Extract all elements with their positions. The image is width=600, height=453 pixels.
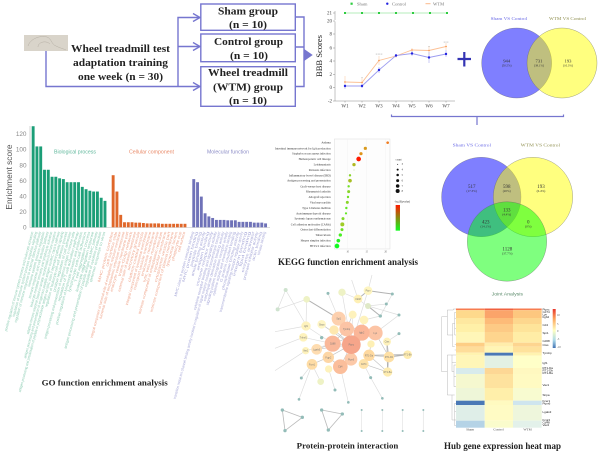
rotated term labels: molecular function: amide binding activity	[191, 231, 206, 277]
box: WTM group: (WTM) group	[213, 82, 283, 94]
box: WTM group: Wheel treadmill	[208, 68, 288, 79]
pathway labels: Allograft rejection	[309, 195, 331, 199]
rotated term labels: molecular function: protease inhibitor activity	[242, 231, 259, 281]
axis tick labels: 21	[327, 12, 332, 17]
node labels: Ptpn	[366, 290, 371, 293]
node labels: RT1-Bb	[404, 355, 412, 357]
heat map cells	[456, 308, 542, 428]
text: adaptation training: Wheel treadmill test	[71, 44, 171, 55]
gene labels: Fcgr2	[542, 418, 550, 422]
significance marks: ***	[443, 40, 449, 44]
venn counts: 0	[527, 220, 530, 226]
venn counts: 193	[537, 185, 545, 190]
rotated term labels: molecular function: immune receptor activity	[196, 231, 214, 286]
text: adaptation training: adaptation training	[73, 58, 168, 69]
node labels	[300, 290, 412, 374]
pathway labels: Leishmaniasis	[314, 163, 331, 167]
venn counts: 1128	[502, 248, 513, 252]
rotated term labels: molecular function: kinase binding	[257, 231, 267, 255]
venn counts: 598	[503, 185, 511, 190]
colour legend: -log10(pvalue)	[394, 201, 410, 204]
connector lines and arrows	[46, 14, 312, 90]
rotated term labels: molecular function: transition metal ion channel binding activity involved in regulation of signal receptor mediated transmembrane transport	[173, 231, 221, 399]
axis tick labels: W1	[341, 104, 349, 110]
rotated term labels: molecular function: MHC protein binding	[181, 231, 199, 282]
rotated term labels: cellular component: cell surface side	[105, 231, 118, 267]
chart legend	[350, 1, 444, 6]
venn counts	[467, 185, 545, 256]
rotated term labels: cellular component: integral component of lysosomal membrane	[125, 231, 148, 306]
colour scale	[553, 309, 561, 349]
rotated term labels: molecular function: antigen binding	[196, 231, 210, 271]
venn labels: Sham VS Control	[491, 16, 528, 21]
rotated term labels: cellular component: external side of plasma membrane	[117, 231, 137, 292]
node labels: Sirpa	[319, 323, 325, 326]
axis tick labels: 6	[330, 47, 332, 52]
network edges	[275, 275, 423, 431]
bars: cellular component	[112, 175, 186, 227]
rotated term labels: cellular component: vacuolar membrane	[153, 231, 167, 273]
panel: GO enrichment bar chart	[4, 126, 270, 399]
venn circles	[442, 157, 573, 281]
pathway labels: Autoimmune thyroid disease	[296, 211, 331, 215]
colour scale: -10	[557, 346, 561, 349]
significance marks: *	[361, 76, 363, 80]
axis tick labels: W7	[442, 104, 450, 110]
venn counts: 133	[503, 208, 511, 214]
pathway labels: Pertussis infection	[309, 168, 331, 172]
pathway labels: Staphylococcus aureus infection	[292, 152, 331, 156]
heat map title: Joint Analysis	[492, 292, 524, 297]
y axis: 60	[19, 178, 27, 185]
venn labels	[491, 16, 587, 21]
gene labels	[542, 308, 553, 427]
box: control group	[201, 34, 295, 62]
axis tick labels: W5	[408, 104, 416, 110]
category labels	[54, 149, 249, 155]
pathway labels: Antigen processing and presentation	[287, 179, 331, 183]
rotated term labels: molecular function: MHC class II protein complex binding	[174, 231, 195, 297]
gene labels: Cd68	[542, 339, 550, 343]
y axis: 80	[19, 162, 27, 169]
venn counts: (4.4%)	[502, 212, 511, 216]
node labels: Cd68	[330, 344, 336, 346]
heading: heat map: Hub gene expression heat map	[444, 441, 561, 451]
rotated term labels: cellular component: intrinsic component of endoplasmic reticulum	[138, 231, 164, 314]
box: WTM group	[201, 67, 295, 107]
y axis: Enrichment score	[4, 144, 14, 210]
y axis: 20	[19, 209, 27, 216]
y axis title: BBB Scores	[315, 35, 324, 77]
column labels: Sham	[466, 428, 474, 432]
pathway labels: Tuberculosis	[315, 233, 331, 237]
size legend: 4	[402, 168, 404, 171]
gene labels: Ptpn6	[542, 402, 551, 406]
node labels: Cd4	[338, 367, 343, 369]
gene labels: Vav2	[542, 423, 549, 427]
rotated term labels: cellular component: lytic vacuole membrane	[142, 231, 160, 282]
rotated term labels: molecular function: cytokine activity and chemokine binding	[212, 231, 233, 296]
axis tick labels: W4	[392, 104, 400, 110]
rotated term labels: cellular component: intrinsic component of plasma membrane	[150, 231, 175, 312]
rotated term labels: cellular component: clathrin-coated vesicle	[127, 231, 145, 282]
column labels	[466, 428, 532, 432]
three-set Venn diagram	[442, 142, 573, 281]
venn counts: (20%)	[503, 189, 511, 193]
venn counts: 944	[503, 58, 511, 64]
node labels: Ptpn6	[348, 358, 355, 361]
rotated term labels: molecular function: transmembrane signaling receptor regulator activity	[219, 231, 244, 312]
heading: KEGG analysis: KEGG function enrichment analysis	[278, 258, 418, 268]
gene labels: Vav1	[542, 383, 549, 387]
rotated term labels: biological process: regulation of immune response to external stimulus pathway	[14, 231, 42, 323]
size legend: 3	[402, 163, 404, 166]
rotated term labels: molecular function: peptide binding	[189, 231, 203, 267]
gene labels: Tyrobp	[542, 351, 552, 355]
gene labels: Spi1	[542, 331, 549, 335]
venn labels	[453, 142, 561, 148]
gene labels: Itgb2	[542, 315, 550, 319]
pathway labels	[275, 141, 331, 248]
rotated term labels: cellular component: endosome membrane	[140, 231, 156, 277]
venn counts: (39.1%)	[534, 64, 544, 68]
panel: protein-protein interaction network	[275, 275, 424, 432]
rotated term labels: biological process: T cell aggregation process	[74, 231, 91, 282]
rotated term labels: molecular function: phosphatase binding activity	[221, 231, 240, 290]
venn counts: 731	[536, 58, 543, 64]
x axis labels: 15	[365, 251, 369, 254]
colour scale: 0	[557, 330, 559, 333]
venn counts: 193	[565, 58, 572, 64]
y axis: 40	[19, 193, 27, 200]
rotated term labels: molecular function: signaling pattern recognition receptor activity	[205, 231, 229, 306]
rotated term labels: biological process: positive regulation of lymphocyte activation and proliferation	[55, 231, 84, 325]
rotated term labels: molecular function: integrin binding	[232, 231, 248, 277]
node labels: Cd74	[361, 364, 367, 366]
plot frame	[334, 139, 390, 249]
category labels: Cellular component	[129, 149, 175, 155]
node labels: Vav1	[303, 351, 309, 353]
axis tick labels: W2	[358, 104, 366, 110]
pathway labels: HTLV-I infection	[310, 244, 331, 248]
axis tick labels: 20	[327, 20, 332, 25]
pathway labels: Graft-versus-host disease	[300, 184, 331, 188]
venn counts: (50.5%)	[502, 64, 512, 68]
axis tick labels: 4	[330, 60, 332, 65]
two-set Venn diagram	[482, 16, 597, 98]
rotated term labels: biological process: defense response to virus	[89, 231, 106, 282]
venn counts: (37.7%)	[502, 252, 512, 256]
axis tick labels: W3	[375, 104, 383, 110]
rotated term labels: biological process: regulation of cytokine production	[84, 231, 102, 287]
gene labels: Lgals3	[542, 410, 552, 414]
node labels: RT1-Da	[365, 355, 374, 357]
rotated term labels: molecular function: actin binding	[251, 231, 263, 261]
node labels: RT1-Db	[385, 357, 394, 359]
flow diagram: study grouping	[24, 4, 312, 107]
rotated term labels: biological process: leukocyte aggregation response	[75, 231, 95, 292]
node labels: Lyn	[373, 333, 378, 335]
size legend: count	[396, 159, 402, 162]
box: sham group	[201, 4, 295, 31]
gene labels: RT1-Da	[542, 366, 553, 370]
rotated term labels: molecular function: cytokine receptor binding and signaling activity	[193, 231, 218, 310]
text: adaptation training: one week (n = 30)	[78, 72, 163, 83]
category labels: Molecular function	[207, 149, 249, 155]
significance marks	[361, 40, 449, 80]
colour scale: 5	[557, 323, 559, 326]
gene labels: Igf1	[542, 361, 548, 365]
chart legend: WTM	[433, 1, 444, 6]
rotated term labels: biological process: regulation of leukocyte cell-cell adhesion process	[44, 231, 69, 308]
venn labels: WTM VS Control	[549, 16, 587, 21]
gene labels: Ptprc	[542, 308, 550, 312]
box: control group: Control group	[214, 37, 283, 48]
rotated term labels: cellular component: secretory granule	[127, 231, 141, 271]
rotated term labels: biological process: antigen processing and presentation of exogenous antigen in immune cells	[43, 231, 76, 339]
rotated term labels: biological process: leukocyte mediated immunity and lymphocyte activation	[29, 231, 53, 308]
box: sham group: (n = 10)	[229, 20, 267, 31]
rotated term labels: cellular component	[90, 231, 186, 339]
pathway labels: Herpes simplex infection	[301, 239, 331, 243]
gene labels: Sirpa	[542, 393, 550, 397]
axis tick labels: 8	[330, 33, 332, 38]
network nodes	[276, 286, 424, 432]
rotated term labels: cellular component: integral component of lumenal side of endoplasmic reticulum membrane	[90, 231, 122, 339]
pathway labels: Asthma	[321, 141, 331, 145]
rotated term labels: cellular component: trans-Golgi network	[118, 231, 133, 277]
venn counts: 517	[468, 185, 476, 190]
rotated term labels: molecular function: carbohydrate derivative binding activity	[203, 231, 225, 302]
size legend: 7	[402, 185, 404, 188]
gene labels: Lyn	[542, 312, 548, 316]
gene labels: Cd48	[542, 420, 550, 424]
x axis labels: 20	[384, 251, 388, 254]
dendrogram	[442, 309, 456, 426]
rotated term labels: biological process: antigen processing and presentation of peptide antigen via MHC pathway	[63, 231, 99, 349]
pathway labels: Intestinal immune network for IgA production	[275, 146, 331, 150]
text: adaptation training	[71, 44, 171, 83]
node labels: Tyrobp	[343, 328, 351, 331]
series: sham	[344, 12, 448, 14]
node labels: Itgb2	[359, 332, 365, 335]
dots	[335, 141, 389, 248]
bracket connector	[392, 114, 564, 125]
x axis labels	[346, 251, 388, 254]
y axis: 120	[16, 131, 27, 138]
rotated term labels: molecular function: lipid binding	[238, 231, 252, 267]
axes	[333, 11, 455, 102]
node labels: Fcer1	[309, 363, 316, 366]
significance marks: ****	[376, 52, 383, 56]
pathway labels: Viral myocarditis	[310, 200, 331, 204]
bars: biological process	[32, 126, 106, 227]
rotated term labels: biological process: antigen processing and presentation of peptide or polysaccharide antigen via MHC class II dependent pathway signaling	[18, 231, 65, 393]
node labels: Spi1	[336, 319, 342, 321]
box: WTM group: (n = 10)	[229, 96, 267, 107]
node labels: Fcgr2	[325, 356, 332, 359]
venn counts: 423	[482, 220, 490, 226]
rotated term labels: biological process: adaptive immune response based on somatic recombination of immune receptors	[26, 231, 57, 335]
venn counts	[502, 58, 573, 68]
column labels: Control	[493, 428, 504, 432]
line chart: BBB scores	[315, 1, 455, 109]
panel: KEGG dot plot	[275, 139, 410, 254]
gene labels: Cd74	[542, 310, 550, 314]
rotated term labels: biological process: lymphocyte cell-cell adhesion	[67, 231, 87, 292]
gene labels: RT1-Db	[542, 368, 553, 372]
rotated term labels: molecular function: G protein coupled binding	[219, 231, 237, 282]
size legend	[396, 159, 404, 193]
pathway labels: Osteoclast differentiation	[300, 228, 331, 232]
rotated term labels: biological process: positive regulation of immune system process and leukocyte activation	[4, 231, 34, 332]
venn counts: (17.3%)	[467, 189, 477, 193]
axis tick labels: W6	[425, 104, 433, 110]
axis tick labels	[327, 12, 450, 110]
pathway labels: Inflammatory bowel disease (IBD)	[289, 173, 331, 177]
node labels: Igf1	[304, 326, 309, 328]
venn counts: (10.3%)	[563, 64, 573, 68]
rotated term labels: cellular component: phagocytic cup	[171, 231, 182, 261]
gene labels: Cd4	[542, 323, 548, 327]
pathway labels: Type I diabetes mellitus	[302, 206, 331, 210]
significance marks: *	[428, 45, 430, 49]
venn counts: (14.1%)	[481, 224, 491, 228]
axis tick labels: 0	[330, 86, 332, 91]
rotated term labels: molecular function	[173, 230, 267, 399]
bars: molecular function	[192, 179, 267, 227]
size legend: 8	[402, 190, 404, 193]
rotated term labels: cellular component: cell surface	[177, 231, 186, 253]
rotated term labels: cellular component: transport vesicle membrane	[133, 231, 152, 290]
node labels: Ctss	[385, 341, 390, 344]
node labels: Lgals3	[313, 349, 321, 351]
pathway labels: Rheumatoid arthritis	[306, 190, 331, 194]
rotated term labels: biological process: positive regulation of cell adhesion	[52, 231, 72, 292]
icon: plus sign	[458, 52, 471, 66]
pathway labels: Systemic lupus erythematosus	[295, 217, 331, 221]
x axis labels: 10	[346, 251, 350, 254]
rotated term labels: biological process: immune response and cell activation pathway	[28, 231, 50, 299]
gene labels: Fcer1	[542, 399, 550, 403]
rotated term labels: cellular component: lumenal side of endoplasmic reticulum membrane	[99, 231, 126, 319]
node labels: RT1-Ba	[384, 372, 392, 374]
category labels: Biological process	[54, 149, 97, 155]
venn labels: Sham VS Control	[453, 142, 492, 148]
panel: hub gene heat map	[442, 292, 561, 432]
heading: protein-protein interaction: Protein-protein interaction	[297, 441, 399, 451]
venn counts: (6.4%)	[537, 189, 545, 193]
chart legend: Sham	[357, 1, 368, 6]
rotated term labels: cellular component: lysosomal lumen	[165, 231, 179, 267]
pathway labels: Hematopoietic cell lineage	[299, 157, 331, 161]
axis tick labels: -2	[328, 100, 332, 105]
gene labels: RT1-Ba	[542, 371, 553, 375]
gene labels: Ctss	[542, 343, 549, 347]
box: sham group: Sham group	[218, 6, 278, 18]
rotated term labels: cellular component: cytoplasmic vesicle part	[154, 231, 171, 282]
axis tick labels: 2	[330, 73, 332, 78]
y axis	[4, 126, 270, 232]
y axis: 100	[16, 147, 27, 154]
size legend: 6	[402, 179, 404, 182]
column labels: WTM	[523, 428, 532, 432]
rotated term labels: molecular function: enzyme activator	[241, 230, 256, 273]
series: WTM	[344, 43, 447, 88]
colour scale: -5	[557, 338, 560, 341]
box: control group: (n = 10)	[230, 51, 268, 62]
node labels: Ptprc	[349, 344, 355, 347]
rotated term labels: biological process: immune system process regulation	[27, 231, 46, 287]
rotated term labels: biological process: antigen processing and presentation of exogenous peptide antigen via MHC class II pathway	[23, 231, 61, 359]
node labels: Tnfrsf1	[300, 336, 308, 339]
y axis: 0	[23, 224, 27, 232]
venn circles	[482, 28, 597, 98]
heading: GO analysis: GO function enrichment analysis	[42, 378, 168, 388]
rotated term labels: cellular component: endocytic vesicle membrane part	[110, 231, 130, 292]
icon: rat photo	[24, 35, 68, 51]
pathway labels: Cell adhesion molecules (CAMs)	[291, 222, 331, 226]
chart legend: Control	[392, 1, 407, 6]
rotated term labels: biological process: regulation of immune system process response signaling	[12, 231, 38, 317]
node labels: Cd48	[355, 299, 361, 301]
venn labels: WTM VS Control	[521, 142, 561, 148]
size legend: 5	[402, 174, 404, 177]
venn counts: (0%)	[525, 224, 531, 228]
rotated term labels: biological process	[4, 231, 106, 393]
colour scale: 10	[557, 314, 560, 317]
rotated term labels: cellular component: MHC protein complex	[97, 231, 115, 282]
rotated term labels: biological process: regulation of T cell activation pathway	[57, 231, 80, 302]
series: control	[344, 50, 447, 89]
